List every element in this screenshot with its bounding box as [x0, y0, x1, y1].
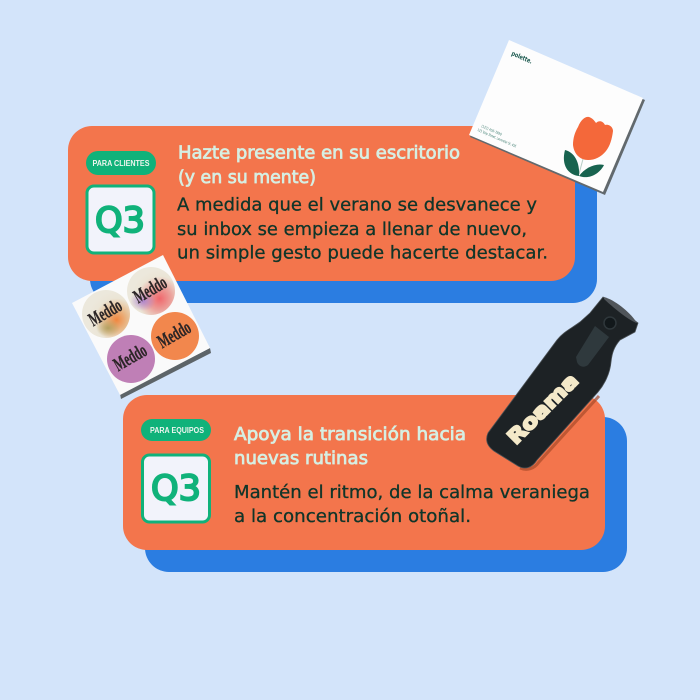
panel: para clientes: [68, 126, 597, 303]
badge: para equipos: PARA EQUIPOS: [150, 426, 205, 435]
sticker: cream pink: Meddo: [129, 271, 171, 308]
heading: Apoya la transición hacia: [234, 425, 466, 445]
icon: tulip: [564, 117, 613, 177]
badge: para clientes: [86, 151, 156, 175]
bottle logo: Roama: [502, 368, 583, 449]
bottle strap: [576, 326, 609, 367]
postcard brand: polette.: [510, 49, 534, 66]
water bottle: [487, 297, 638, 469]
icon: Q3 box: Q3: [95, 201, 145, 241]
icon: Q3 box: [87, 186, 154, 253]
bottle drop shadow: [520, 396, 599, 469]
body text: su inbox se empieza a llenar de nuevo,: [177, 219, 527, 240]
bottle cap top: [604, 297, 637, 323]
orange card: [123, 395, 605, 550]
heading: [234, 425, 466, 469]
body text: a la concentración otoñal.: [234, 506, 471, 527]
blue offset card: [145, 417, 627, 572]
bottle body: [487, 297, 638, 468]
postcard address: 123 Tulip Street, Lavender St, 456: [477, 128, 517, 149]
sticker sheet: [72, 255, 211, 399]
sticker: orange: Meddo: [153, 316, 195, 353]
heading: [178, 144, 460, 188]
icon: Q3 box: Q3: [151, 469, 201, 509]
postcard address: (123) 456-7890: [481, 124, 503, 137]
body text: [234, 482, 590, 527]
heading: Hazte presente en su escritorio: [178, 144, 460, 164]
heading: (y en su mente): [178, 168, 316, 188]
sticker: cream orange: Meddo: [84, 294, 126, 331]
body text: [177, 194, 548, 264]
bottle button: [604, 317, 616, 329]
panel: para equipos: [123, 395, 627, 572]
heading: nuevas rutinas: [234, 449, 368, 469]
icon: Q3 box: [142, 455, 210, 522]
body text: un simple gesto puede hacerte destacar.: [177, 242, 548, 264]
sticker: purple: Meddo: [109, 339, 151, 376]
badge: para clientes: PARA CLIENTES: [92, 159, 150, 168]
body text: A medida que el verano se desvanece y: [177, 194, 537, 216]
badge: para equipos: [141, 419, 211, 441]
postcard: [469, 40, 645, 195]
postcard address: [477, 123, 519, 149]
blue offset card: [90, 148, 597, 303]
body text: Mantén el ritmo, de la calma veraniega: [234, 482, 590, 503]
orange card: [68, 126, 575, 281]
